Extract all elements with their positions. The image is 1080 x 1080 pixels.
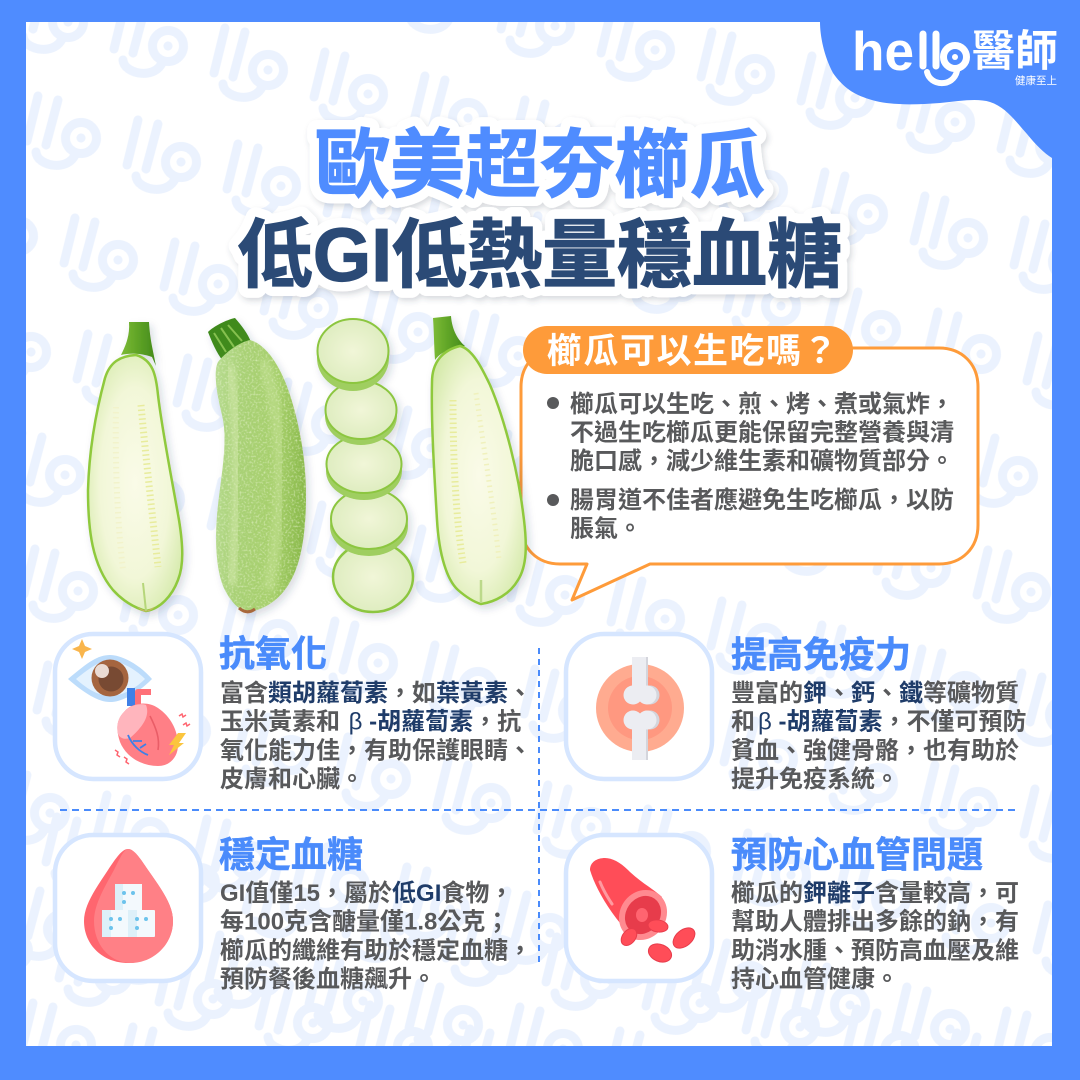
callout bullet 1: 不過生吃櫛瓜更能保留完整營養與清	[570, 420, 954, 446]
text block: 和	[731, 709, 755, 736]
logo corner blob	[820, 22, 1052, 158]
text block: 櫛瓜的纖維有助於穩定血糖，	[220, 937, 532, 964]
icon: blood drop with sugar cubes	[55, 835, 201, 981]
title: 歐美超夯櫛瓜	[315, 123, 765, 207]
text block: 富含類胡蘿蔔素，如葉黃素、	[220, 680, 532, 707]
icon: bone joint	[566, 634, 712, 779]
title	[238, 123, 842, 297]
icon: blood vessel and cells	[566, 835, 712, 981]
text block: 幫助人體排出多餘的鈉，有	[731, 908, 1019, 936]
text block: β -胡蘿蔔素，抗	[349, 709, 521, 736]
text block: 豐富的鉀、鈣、鐵等礦物質	[731, 680, 1019, 707]
text block: 皮膚和心臟。	[220, 766, 364, 793]
text block: 持心血管健康。	[731, 966, 899, 993]
callout bullet 2: 腸胃道不佳者應避免生吃櫛瓜，以防	[570, 487, 954, 514]
callout bullet 2	[547, 486, 954, 542]
heading: 抗氧化	[219, 633, 327, 674]
text block: 玉米黃素和	[220, 709, 347, 736]
text block: 提升免疫系統。	[731, 766, 899, 793]
text block: β -胡蘿蔔素，不僅可預防	[758, 709, 1026, 736]
zucchini half right	[432, 316, 526, 604]
horizontal dashed divider	[60, 809, 1018, 811]
title: 低GI低熱量穩血糖	[238, 213, 842, 297]
callout bullet 1	[547, 391, 954, 475]
text block: 每100克含醣量僅1.8公克；	[220, 909, 509, 936]
text block: 貧血、強健骨骼，也有助於	[731, 736, 1019, 764]
callout bullet 1: 櫛瓜可以生吃、煎、烤、煮或氣炸，	[570, 391, 954, 418]
icon: eye and heart	[55, 634, 201, 779]
heading: 預防心血管問題	[731, 834, 983, 875]
panel: antioxidant	[55, 633, 532, 793]
heading: 穩定血糖	[219, 834, 363, 875]
logo: hello 醫師: he	[852, 20, 914, 82]
logo: hello 醫師	[852, 20, 1058, 87]
text block: 氧化能力佳，有助保護眼睛、	[220, 737, 532, 764]
text block: 櫛瓜的鉀離子含量較高，可	[731, 880, 1019, 907]
zucchini halves and slices photo	[88, 316, 526, 612]
logo: hello 醫師: 健康至上	[1015, 74, 1057, 87]
panel: cardiovascular	[566, 834, 1019, 993]
zucchini slices stack	[317, 319, 413, 612]
callout bullet 2: 脹氣。	[570, 516, 642, 542]
title: 歐美超夯櫛瓜	[315, 123, 765, 207]
heading: 提高免疫力	[731, 634, 911, 675]
speech bubble outline	[521, 348, 978, 600]
text block: GI值僅15，屬於低GI食物，	[220, 880, 513, 907]
logo: hello 醫師: 醫師	[972, 28, 1058, 76]
zucchini half left	[88, 322, 182, 612]
vertical dashed divider	[538, 648, 540, 966]
callout heading pill: 櫛瓜可以生吃嗎？	[547, 332, 839, 371]
whole zucchini	[208, 318, 306, 612]
panel: immunity	[566, 634, 1026, 793]
text block: 預防餐後血糖飆升。	[220, 966, 436, 993]
panel: stable blood sugar	[55, 834, 532, 993]
text block: 助消水腫、預防高血壓及維	[731, 937, 1019, 964]
title: 低GI低熱量穩血糖	[238, 213, 842, 297]
callout bullet 1: 脆口感，減少維生素和礦物質部分。	[570, 447, 954, 475]
callout: can zucchini be eaten raw	[521, 326, 978, 600]
